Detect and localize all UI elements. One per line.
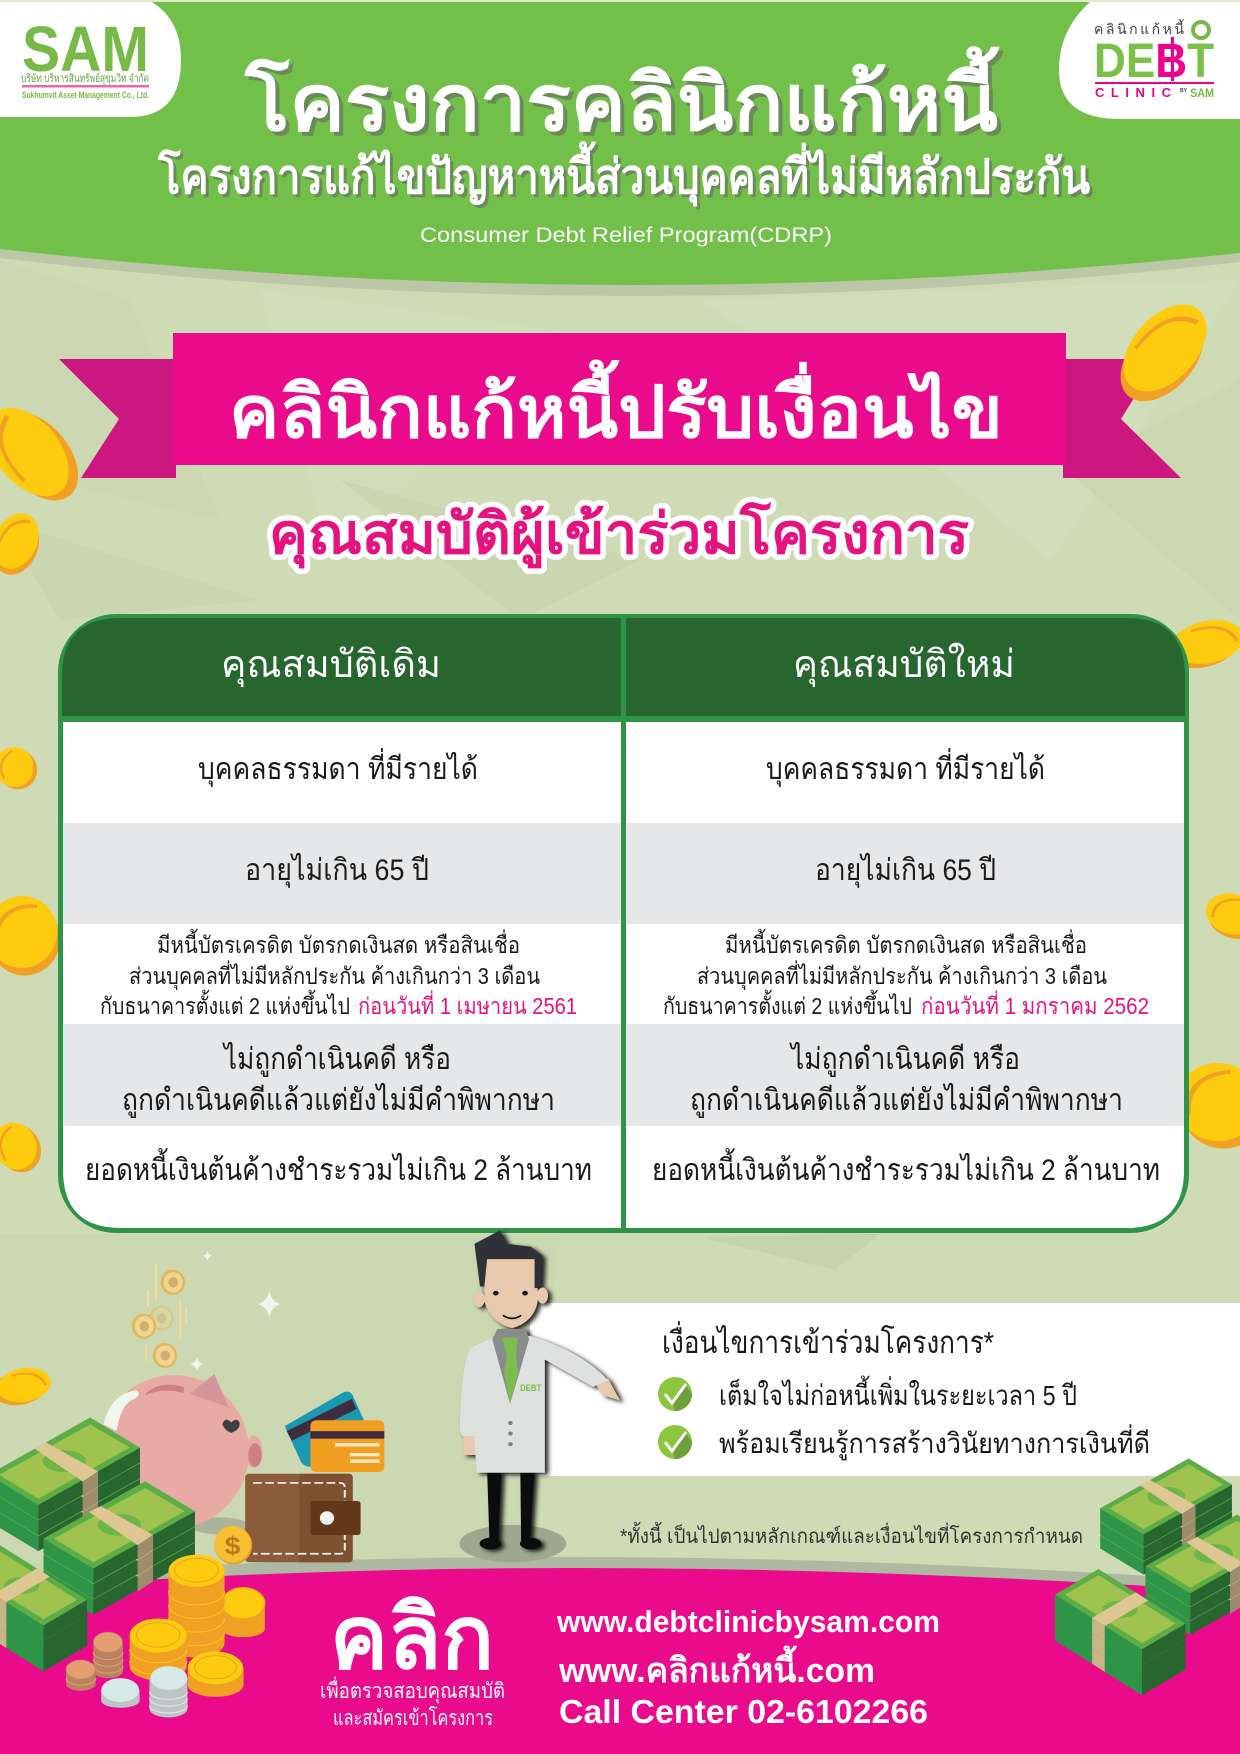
logo: SAM (0, 2, 181, 117)
illustration: piggy bank (99, 1374, 263, 1534)
illustration: money stacks left (0, 1418, 195, 1671)
illustration: doctor (459, 1230, 620, 1562)
background coins (0, 289, 1240, 1409)
illustration: wallet (214, 1474, 361, 1564)
logo: Debt Clinic: CLINIC (1095, 85, 1172, 100)
logo: SAM: บริษัท บริหารสินทรัพย์สุขุมวิท จำกัด (21, 72, 149, 85)
row: principal (85, 1148, 1160, 1187)
illustration: falling coins and sparkles (132, 1250, 281, 1372)
click call to action: และสมัครเข้าโครงการ (333, 1706, 493, 1730)
row: principal: ยอดหนี้เงินต้นค้างชำระรวมไม่เกิน 2 ล้านบาท (652, 1148, 1160, 1187)
click call to action: คลิก (330, 1588, 494, 1687)
row: person (198, 748, 1045, 788)
click call to action (320, 1588, 505, 1730)
row: lawsuit: ถูกดำเนินคดีแล้วแต่ยังไม่มีคำพิพากษา (122, 1082, 555, 1118)
illustration: coin stacks (66, 1555, 265, 1717)
title: โครงการคลินิกแก้หนี้ (244, 46, 1000, 147)
row: debts: กับธนาคารตั้งแต่ 2 แห่งขึ้นไป (100, 990, 350, 1019)
row: debts: มีหนี้บัตรเครดิต บัตรกดเงินสด หรือสินเชื่อ (725, 929, 1087, 958)
row: lawsuit: ไม่ถูกดำเนินคดี หรือ (789, 1041, 1020, 1077)
row: age: อายุไม่เกิน 65 ปี (245, 852, 429, 889)
logo: Debt Clinic: คลินิกแก้หนี้ (1094, 19, 1184, 37)
row: debts: ก่อนวันที่ 1 เมษายน 2561 (358, 990, 577, 1019)
illustration: credit cards (285, 1392, 384, 1472)
row: debts (100, 929, 1149, 1019)
check icon 1 (658, 1377, 692, 1411)
row: debts: ส่วนบุคคลที่ไม่มีหลักประกัน ค้างเกินกว่า 3 เดือน (129, 960, 540, 990)
contact details (556, 1604, 940, 1730)
row: debts: ส่วนบุคคลที่ไม่มีหลักประกัน ค้างเกินกว่า 3 เดือน (697, 960, 1107, 990)
row: debts: มีหนี้บัตรเครดิต บัตรกดเงินสด หรือสินเชื่อ (157, 929, 520, 958)
logo: Debt Clinic (1059, 2, 1240, 119)
conditions heading: เงื่อนไขการเข้าร่วมโครงการ* (662, 1321, 994, 1360)
row: debts: ก่อนวันที่ 1 มกราคม 2562 (921, 990, 1149, 1019)
logo: Debt Clinic: SAM (1190, 86, 1214, 100)
logo: SAM: Sukhumvit Asset Management Co., Ltd. (22, 90, 149, 100)
row: debts: กับธนาคารตั้งแต่ 2 แห่งขึ้นไป (663, 990, 912, 1019)
click call to action: เพื่อตรวจสอบคุณสมบัติ (320, 1676, 505, 1704)
row: lawsuit (122, 1041, 1123, 1118)
illustration: money stacks right (1055, 1458, 1240, 1695)
ribbon banner: คลินิกแก้หนี้ปรับเงื่อนไข (229, 359, 1003, 453)
footer band (0, 1557, 1240, 1754)
contact details: www.คลิกแก้หนี้.com (558, 1645, 875, 1690)
condition 2: พร้อมเรียนรู้การสร้างวินัยทางการเงินที่ดี (719, 1424, 1150, 1461)
illustration: doctor: DEBT (520, 1384, 541, 1394)
row: lawsuit: ถูกดำเนินคดีแล้วแต่ยังไม่มีคำพิพากษา (690, 1082, 1123, 1118)
section heading: คุณสมบัติผู้เข้าร่วมโครงการ (269, 501, 969, 569)
row: person: บุคคลธรรมดา ที่มีรายได้ (198, 748, 478, 788)
contact details: www.debtclinicbysam.com (556, 1604, 940, 1639)
coin over ribbon (0, 289, 1226, 518)
illustration: wallet: $ (225, 1532, 241, 1559)
conditions panel (530, 1303, 1240, 1476)
logo: SAM: SAM (22, 13, 149, 85)
logo: Debt Clinic: DEBT (1094, 35, 1214, 88)
table header: new criteria: คุณสมบัติใหม่ (793, 643, 1015, 687)
ribbon banner (59, 333, 1181, 478)
subtitle: โครงการแก้ไขปัญหาหนี้ส่วนบุคคลที่ไม่มีหลักประกัน (157, 141, 1090, 207)
condition 1: เต็มใจไม่ก่อหนี้เพิ่มในระยะเวลา 5 ปี (719, 1375, 1077, 1411)
row: age (245, 852, 996, 889)
header band (0, 0, 1240, 296)
row: age: อายุไม่เกิน 65 ปี (815, 852, 996, 889)
footnote: *ทั้งนี้ เป็นไปตามหลักเกณฑ์และเงื่อนไขที่โครงการกำหนด (620, 1522, 1083, 1548)
row: principal: ยอดหนี้เงินต้นค้างชำระรวมไม่เกิน 2 ล้านบาท (85, 1148, 592, 1187)
english program name: Consumer Debt Relief Program(CDRP) (420, 224, 832, 247)
contact details: Call Center 02-6102266 (559, 1693, 928, 1730)
row: person: บุคคลธรรมดา ที่มีรายได้ (766, 748, 1045, 788)
table header: old criteria: คุณสมบัติเดิม (221, 644, 441, 687)
comparison table (58, 614, 1189, 1233)
check icon 2 (658, 1425, 692, 1459)
row: lawsuit: ไม่ถูกดำเนินคดี หรือ (222, 1041, 451, 1077)
logo: Debt Clinic: BY (1180, 88, 1188, 94)
